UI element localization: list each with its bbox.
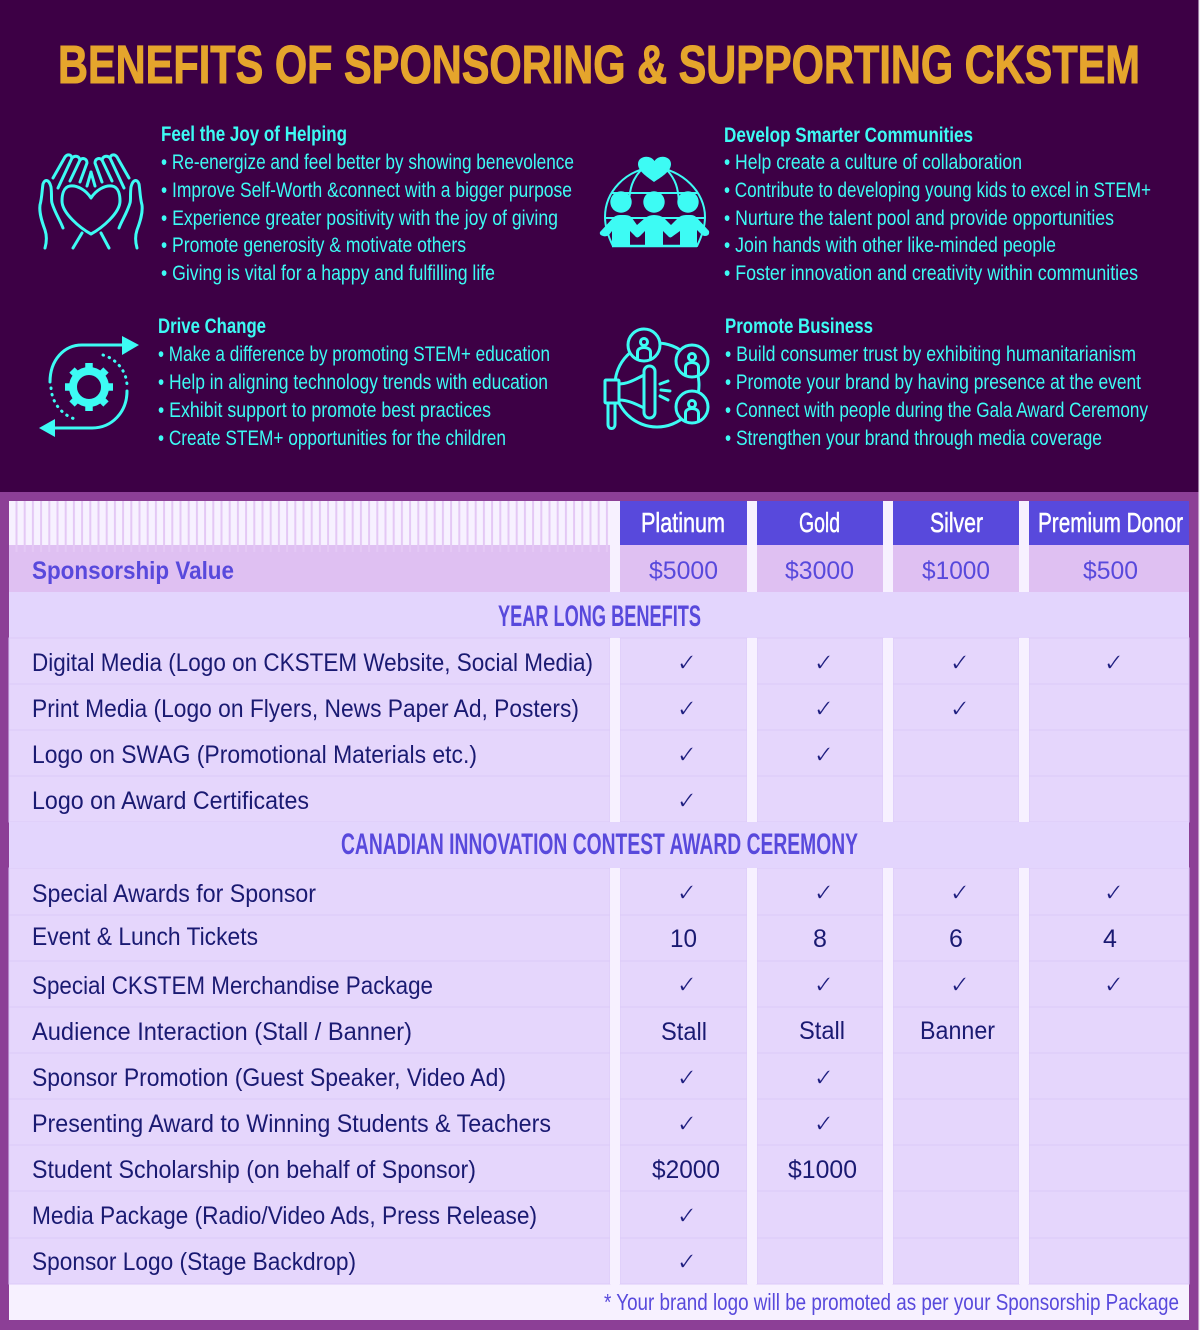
section heading: year long benefits xyxy=(9,592,1189,638)
row: sponsor promotion: ✓ xyxy=(814,1063,834,1092)
row: audience interaction: Stall xyxy=(661,1018,707,1046)
row: print media xyxy=(32,694,970,723)
row: presenting award: Presenting Award to Winning Students & Teachers xyxy=(32,1110,551,1138)
row: digital media: ✓ xyxy=(1104,648,1124,677)
row: sponsorship value: $1000 xyxy=(922,557,990,585)
row: logo on award certificates: Logo on Award Certificates xyxy=(32,787,309,815)
row: sponsor promotion: Sponsor Promotion (Guest Speaker, Video Ad) xyxy=(32,1064,506,1092)
row: presenting award xyxy=(32,1109,834,1138)
bullet list: promote business: • Strengthen your brand through media coverage xyxy=(725,427,1102,450)
bullet list: promote business: • Build consumer trust by exhibiting humanitarianism xyxy=(725,343,1136,366)
section heading: canadian innovation contest award ceremony: CANADIAN INNOVATION CONTEST AWARD CEREMONY xyxy=(341,828,858,861)
row: audience interaction: Banner xyxy=(920,1017,995,1045)
bullet list: joy of helping xyxy=(161,151,574,285)
bullet list: smarter communities: • Foster innovation and creativity within communities xyxy=(724,262,1138,285)
row: event and lunch tickets: Event & Lunch Tickets xyxy=(32,923,258,951)
icon: community under dome xyxy=(600,157,709,246)
row: sponsor logo: Sponsor Logo (Stage Backdrop) xyxy=(32,1248,356,1276)
heading: develop smarter communities: Develop Smarter Communities xyxy=(724,124,973,147)
section heading: year long benefits: YEAR LONG BENEFITS xyxy=(498,600,701,633)
row: event and lunch tickets: 8 xyxy=(813,925,827,953)
panel: promote business xyxy=(605,315,1148,450)
row: presenting award: ✓ xyxy=(677,1109,697,1138)
row: logo on award certificates: ✓ xyxy=(677,786,697,815)
row: presenting award: ✓ xyxy=(814,1109,834,1138)
row: student scholarship xyxy=(32,1156,857,1184)
table header row: tiers: Platinum xyxy=(641,507,725,538)
row: digital media: ✓ xyxy=(950,648,970,677)
row: special awards for sponsor xyxy=(32,878,1124,908)
row: sponsor promotion: ✓ xyxy=(677,1063,697,1092)
row: special awards for sponsor: ✓ xyxy=(950,878,970,907)
row: sponsorship value: Sponsorship Value xyxy=(32,557,234,585)
row: media package: Media Package (Radio/Video Ads, Press Release) xyxy=(32,1202,537,1230)
data cell backgrounds xyxy=(9,638,1189,1284)
row: event and lunch tickets: 6 xyxy=(949,925,963,953)
bullet list: smarter communities: • Join hands with other like-minded people xyxy=(724,234,1056,257)
row: merchandise package xyxy=(32,970,1124,1000)
row: logo on award certificates xyxy=(32,786,697,815)
bullet list: drive change: • Create STEM+ opportunities for the children xyxy=(158,427,506,450)
bullet list: smarter communities: • Nurture the talent pool and provide opportunities xyxy=(724,207,1114,230)
row: sponsorship value xyxy=(9,545,1189,592)
row: digital media: Digital Media (Logo on CKSTEM Website, Social Media) xyxy=(32,649,593,677)
table header row: tiers: Silver xyxy=(930,507,983,538)
table header row: tiers xyxy=(620,501,1189,545)
row: logo on swag: Logo on SWAG (Promotional Materials etc.) xyxy=(32,741,477,769)
row: logo on swag: ✓ xyxy=(814,740,834,769)
row: digital media xyxy=(32,648,1124,677)
bullet list: drive change: • Help in aligning technology trends with education xyxy=(158,371,548,394)
row: merchandise package: ✓ xyxy=(677,970,697,999)
white column gutters xyxy=(610,638,1029,1284)
row: special awards for sponsor: ✓ xyxy=(814,878,834,907)
bullet list: drive change: • Exhibit support to promote best practices xyxy=(158,399,491,422)
bullet list: smarter communities xyxy=(724,151,1151,285)
heading: feel the joy of helping: Feel the Joy of Helping xyxy=(161,123,347,146)
row: merchandise package: ✓ xyxy=(950,970,970,999)
icon: cycle arrows with gear xyxy=(39,336,139,437)
bullet list: drive change xyxy=(158,343,550,450)
section heading: canadian innovation contest award ceremony xyxy=(9,822,1189,868)
row: sponsor promotion xyxy=(32,1063,834,1092)
bullet list: smarter communities: • Help create a culture of collaboration xyxy=(724,151,1022,174)
row: audience interaction: Stall xyxy=(799,1017,845,1045)
row: logo on swag xyxy=(32,740,834,769)
bullet list: joy of helping: • Re-energize and feel better by showing benevolence xyxy=(161,151,574,174)
row: merchandise package: ✓ xyxy=(1104,970,1124,999)
panel: drive change xyxy=(39,315,550,450)
row: sponsorship value: $500 xyxy=(1083,557,1138,585)
row: event and lunch tickets xyxy=(32,923,1117,953)
row: digital media: ✓ xyxy=(814,648,834,677)
row: print media: ✓ xyxy=(677,694,697,723)
row: merchandise package: ✓ xyxy=(814,970,834,999)
row: special awards for sponsor: Special Awards for Sponsor xyxy=(32,880,316,908)
row: print media: Print Media (Logo on Flyers, News Paper Ad, Posters) xyxy=(32,695,579,723)
heading: drive change: Drive Change xyxy=(158,315,266,338)
heading: promote business: Promote Business xyxy=(725,315,873,338)
row: sponsorship value: $5000 xyxy=(649,557,718,585)
bullet list: joy of helping: • Promote generosity & motivate others xyxy=(161,234,466,257)
panel: sponsorship table xyxy=(0,492,1200,1330)
row: logo on swag: ✓ xyxy=(677,740,697,769)
row: merchandise package: Special CKSTEM Merchandise Package xyxy=(32,972,433,1000)
bullet list: joy of helping: • Experience greater positivity with the joy of giving xyxy=(161,207,558,230)
row: audience interaction: Audience Interaction (Stall / Banner) xyxy=(32,1018,412,1046)
table header row: tiers: Gold xyxy=(799,507,840,538)
row: special awards for sponsor: ✓ xyxy=(1104,878,1124,907)
panel: develop smarter communities xyxy=(600,124,1151,285)
decorative header stripes xyxy=(10,501,610,552)
icon: hands holding heart xyxy=(40,155,142,248)
row: audience interaction xyxy=(32,1017,995,1046)
row: sponsor logo: ✓ xyxy=(677,1247,697,1276)
bullet list: promote business xyxy=(725,343,1148,450)
row: special awards for sponsor: ✓ xyxy=(677,878,697,907)
row: print media: ✓ xyxy=(950,694,970,723)
icon: megaphone and people xyxy=(605,329,708,428)
row: digital media: ✓ xyxy=(677,648,697,677)
panel: feel the joy of helping xyxy=(40,123,574,285)
row: print media: ✓ xyxy=(814,694,834,723)
bullet list: joy of helping: • Improve Self-Worth &connect with a bigger purpose xyxy=(161,179,572,202)
row: event and lunch tickets: 4 xyxy=(1103,925,1117,953)
row: student scholarship: $2000 xyxy=(652,1156,720,1184)
bullet list: joy of helping: • Giving is vital for a happy and fulfilling life xyxy=(161,262,495,285)
row: sponsorship value: $3000 xyxy=(785,557,854,585)
row: event and lunch tickets: 10 xyxy=(670,925,697,953)
row: media package: ✓ xyxy=(677,1201,697,1230)
row: sponsor logo xyxy=(32,1247,697,1276)
row: student scholarship: $1000 xyxy=(788,1156,857,1184)
row: student scholarship: Student Scholarship (on behalf of Sponsor) xyxy=(32,1156,476,1184)
bullet list: drive change: • Make a difference by promoting STEM+ education xyxy=(158,343,550,366)
